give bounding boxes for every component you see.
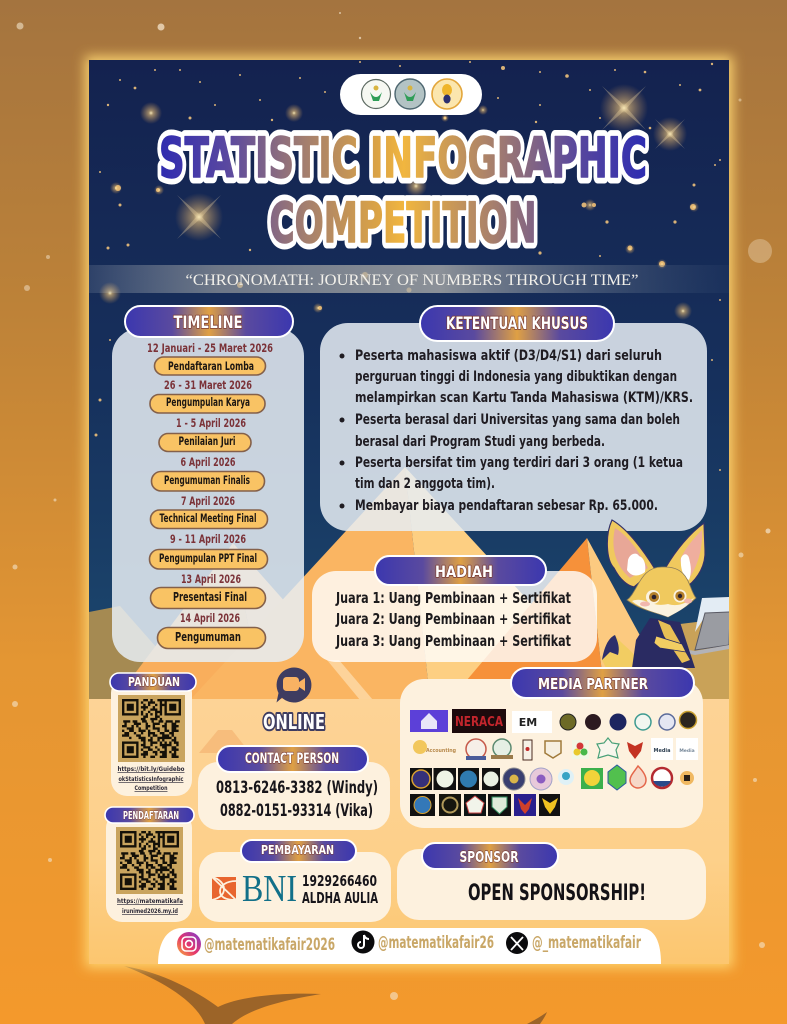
panel: ketentuan khusus [320, 306, 707, 531]
panel: panduan: okStatisticsInfographic [118, 775, 184, 783]
panel: pendaftaran: PENDAFTARAN [123, 810, 179, 822]
panel: timeline: 14 April 2026 [180, 611, 240, 625]
logos row 2 [413, 738, 698, 760]
icon: x [506, 932, 528, 954]
tagline band [89, 265, 729, 293]
panel: ketentuan khusus: KETENTUAN KHUSUS [446, 314, 588, 333]
title: COMPETITION [270, 191, 536, 255]
logos row 3 [410, 765, 694, 790]
panel: panduan: https://bit.ly/Guidebo [118, 765, 185, 773]
panel: timeline: 12 Januari - 25 Maret 2026 [147, 341, 273, 355]
panel: hadiah: HADIAH [435, 562, 493, 581]
panel: media partner [400, 668, 703, 828]
panel: timeline: Technical Meeting Final [160, 511, 256, 525]
glowing stars [99, 84, 699, 320]
panel: contact person: 0813-6246-3382 (Windy) [216, 778, 378, 797]
social media bar: @matematikafair2026 [204, 935, 335, 955]
social media bar: @matematikafair26 [378, 933, 494, 953]
panel: sponsor [397, 843, 706, 920]
social media bar [158, 928, 661, 964]
logos row 2: Media [679, 748, 695, 754]
panel: timeline: 26 - 31 Maret 2026 [164, 378, 252, 392]
poster glow [85, 56, 733, 968]
panel: panduan [110, 673, 196, 796]
panel: timeline: Presentasi Final [173, 589, 247, 604]
night sky [89, 60, 729, 705]
icon: instagram [177, 932, 201, 956]
online label: ONLINE [263, 710, 325, 734]
panel: sponsor: SPONSOR [460, 848, 519, 866]
panel: ketentuan khusus: Peserta berasal dari Universitas yang sama dan boleh [355, 412, 680, 428]
panel: pembayaran: PEMBAYARAN [261, 842, 334, 857]
logos row 1: EM [519, 716, 537, 729]
title [159, 126, 647, 255]
panel: timeline: Pengumpulan Karya [166, 395, 250, 409]
panel: timeline: 7 April 2026 [181, 494, 235, 508]
panel: timeline: Pengumpulan PPT Final [159, 551, 257, 565]
pyramids and sand [89, 467, 729, 964]
panel: pembayaran: 1929266460 [302, 872, 377, 890]
panel: hadiah: Juara 2: Uang Pembinaan + Sertifikat [335, 610, 571, 628]
panel: timeline: Pengumuman [175, 629, 241, 644]
panel: timeline: 13 April 2026 [181, 572, 241, 586]
panel: timeline: Penilaian Juri [178, 434, 236, 448]
panel: contact person [198, 746, 390, 830]
panel: ketentuan khusus: perguruan tinggi di Indonesia yang dibuktikan dengan [355, 369, 677, 385]
panel: timeline: Pengumuman Finalis [164, 473, 250, 487]
logo pill [340, 74, 482, 115]
panel: timeline: Pendaftaran Lomba [168, 359, 254, 373]
panel: ketentuan khusus: Peserta bersifat tim yang terdiri dari 3 orang (1 ketua [355, 455, 683, 471]
panel: ketentuan khusus: tim dan 2 anggota tim). [355, 476, 495, 492]
panel: hadiah: Juara 1: Uang Pembinaan + Sertifikat [335, 589, 571, 607]
panel: pendaftaran [105, 807, 194, 922]
panel: timeline: 6 April 2026 [180, 455, 236, 469]
small stars [94, 61, 721, 471]
social media bar: @_matematikafair [532, 933, 641, 953]
logos row 2: Media [653, 748, 671, 754]
panel: pendaftaran: irunimed2026.my.id [122, 907, 178, 915]
panel: timeline: 9 - 11 April 2026 [170, 532, 246, 546]
panel: sponsor: OPEN SPONSORSHIP! [468, 881, 646, 906]
panel: ketentuan khusus: melampirkan scan Kartu Tanda Mahasiswa (KTM)/KRS. [355, 390, 693, 406]
icon: online video camera [276, 668, 311, 702]
panel: pembayaran: BNI [242, 868, 297, 910]
panel: pendaftaran: https://matematikafa [117, 897, 183, 905]
logos row 1: NERACA [455, 715, 503, 730]
panel: contact person: 0882-0151-93314 (Vika) [220, 801, 373, 820]
panel: contact person: CONTACT PERSON [245, 751, 339, 767]
panel: timeline [112, 306, 304, 662]
panel: timeline: TIMELINE [174, 313, 242, 333]
panel: panduan: PANDUAN [128, 675, 180, 689]
panel: timeline: 1 - 5 April 2026 [176, 416, 246, 430]
panel: ketentuan khusus: berasal dari Program Studi yang berbeda. [355, 434, 605, 450]
bird silhouette [124, 966, 547, 1024]
panel: hadiah: Juara 3: Uang Pembinaan + Sertifikat [335, 632, 571, 650]
poster [89, 60, 730, 964]
panel: ketentuan khusus: Membayar biaya pendaftaran sebesar Rp. 65.000. [355, 498, 658, 514]
tagline band: “CHRONOMATH: JOURNEY OF NUMBERS THROUGH TIME” [186, 272, 639, 289]
icon: tiktok [352, 930, 374, 954]
logos row 1 [410, 709, 696, 733]
icon: fennec fox mascot with laptop [602, 520, 730, 668]
panel: panduan: Competition [134, 784, 168, 792]
panel: ketentuan khusus: Peserta mahasiswa aktif (D3/D4/S1) dari seluruh [355, 348, 662, 364]
panel: media partner: MEDIA PARTNER [538, 675, 648, 693]
panel: pembayaran: ALDHA AULIA [302, 889, 378, 907]
panel: pembayaran [199, 840, 391, 922]
logos row 4 [410, 794, 560, 816]
title: COMPETITION [270, 191, 536, 255]
panel: hadiah [312, 556, 597, 662]
logos row 2: Accounting [426, 748, 456, 754]
